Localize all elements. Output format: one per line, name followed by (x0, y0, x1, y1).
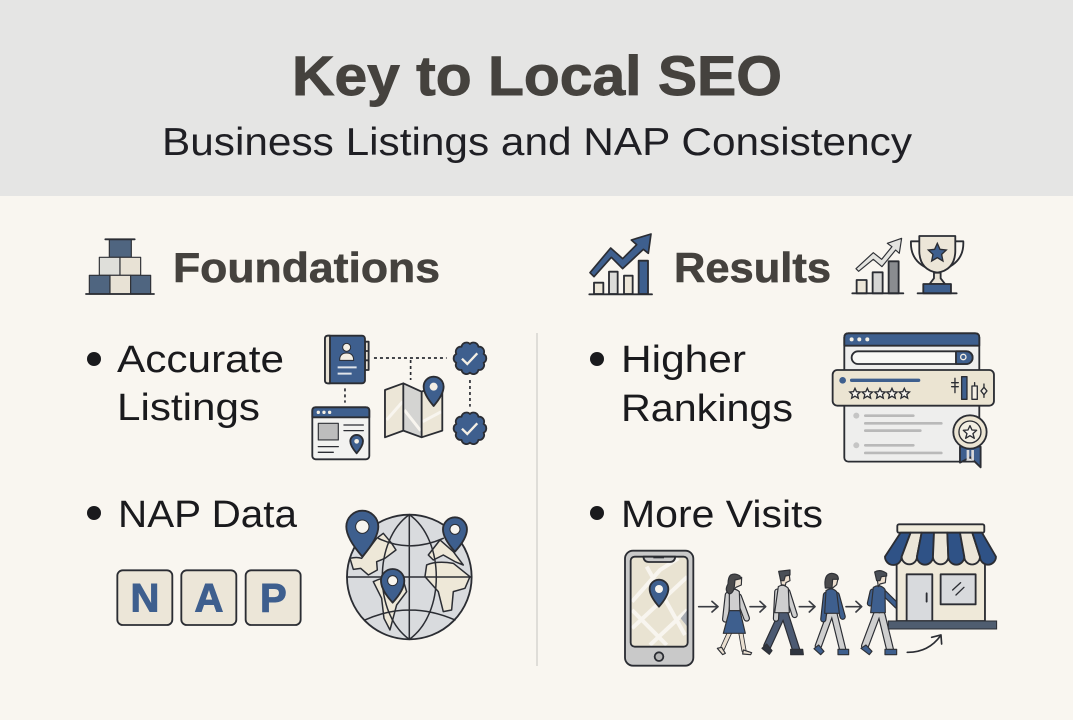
icon: globe with pins (346, 511, 472, 639)
icon: phone with map (625, 551, 693, 666)
icon: growth chart (589, 234, 652, 294)
icon: listings network (312, 336, 486, 459)
address book (325, 336, 369, 383)
walker 4: man in navy (861, 571, 901, 655)
title: Key to Local SEO (292, 44, 782, 107)
heading: Foundations: Foundations (173, 244, 440, 291)
walker 1: woman in skirt (717, 574, 752, 655)
globe grid (347, 515, 472, 639)
bullet: Higher Rankings (590, 339, 793, 430)
bullet: Higher Rankings: Rankings (621, 388, 793, 430)
verified badge top (454, 343, 486, 374)
continents (350, 533, 470, 630)
icon: storefront (885, 524, 997, 652)
folded map (385, 377, 444, 437)
header band (0, 0, 1073, 196)
heading: Results: Results (674, 244, 831, 291)
icon: small chart (852, 238, 903, 293)
NAP letter tiles: A (195, 577, 223, 621)
bullet: Higher Rankings: Higher (621, 339, 746, 381)
NAP letter tiles: N (131, 577, 159, 621)
highlighted result card (833, 370, 994, 406)
icon: foundation blocks (86, 239, 154, 294)
bullet: Accurate Listings (87, 339, 284, 429)
walker 3: woman in navy (814, 573, 849, 655)
arrows between walkers (699, 601, 862, 612)
NAP letter tiles (117, 570, 301, 625)
icon: search results page (833, 333, 994, 467)
striped awning (885, 533, 996, 565)
icon: trophy (911, 236, 963, 293)
verified badge bottom (454, 413, 486, 444)
award seal (953, 415, 987, 467)
browser listing card (312, 407, 369, 459)
NAP letter tiles: P (260, 577, 287, 621)
subtitle: Business Listings and NAP Consistency (162, 121, 913, 164)
curved arrow (907, 635, 942, 652)
bullet: Accurate Listings: Accurate (117, 339, 284, 381)
walker 2: man in grey (762, 570, 803, 655)
bullet: More Visits: More Visits (621, 494, 823, 536)
bullet: Accurate Listings: Listings (117, 387, 260, 429)
bullet: NAP Data: NAP Data (118, 494, 298, 536)
